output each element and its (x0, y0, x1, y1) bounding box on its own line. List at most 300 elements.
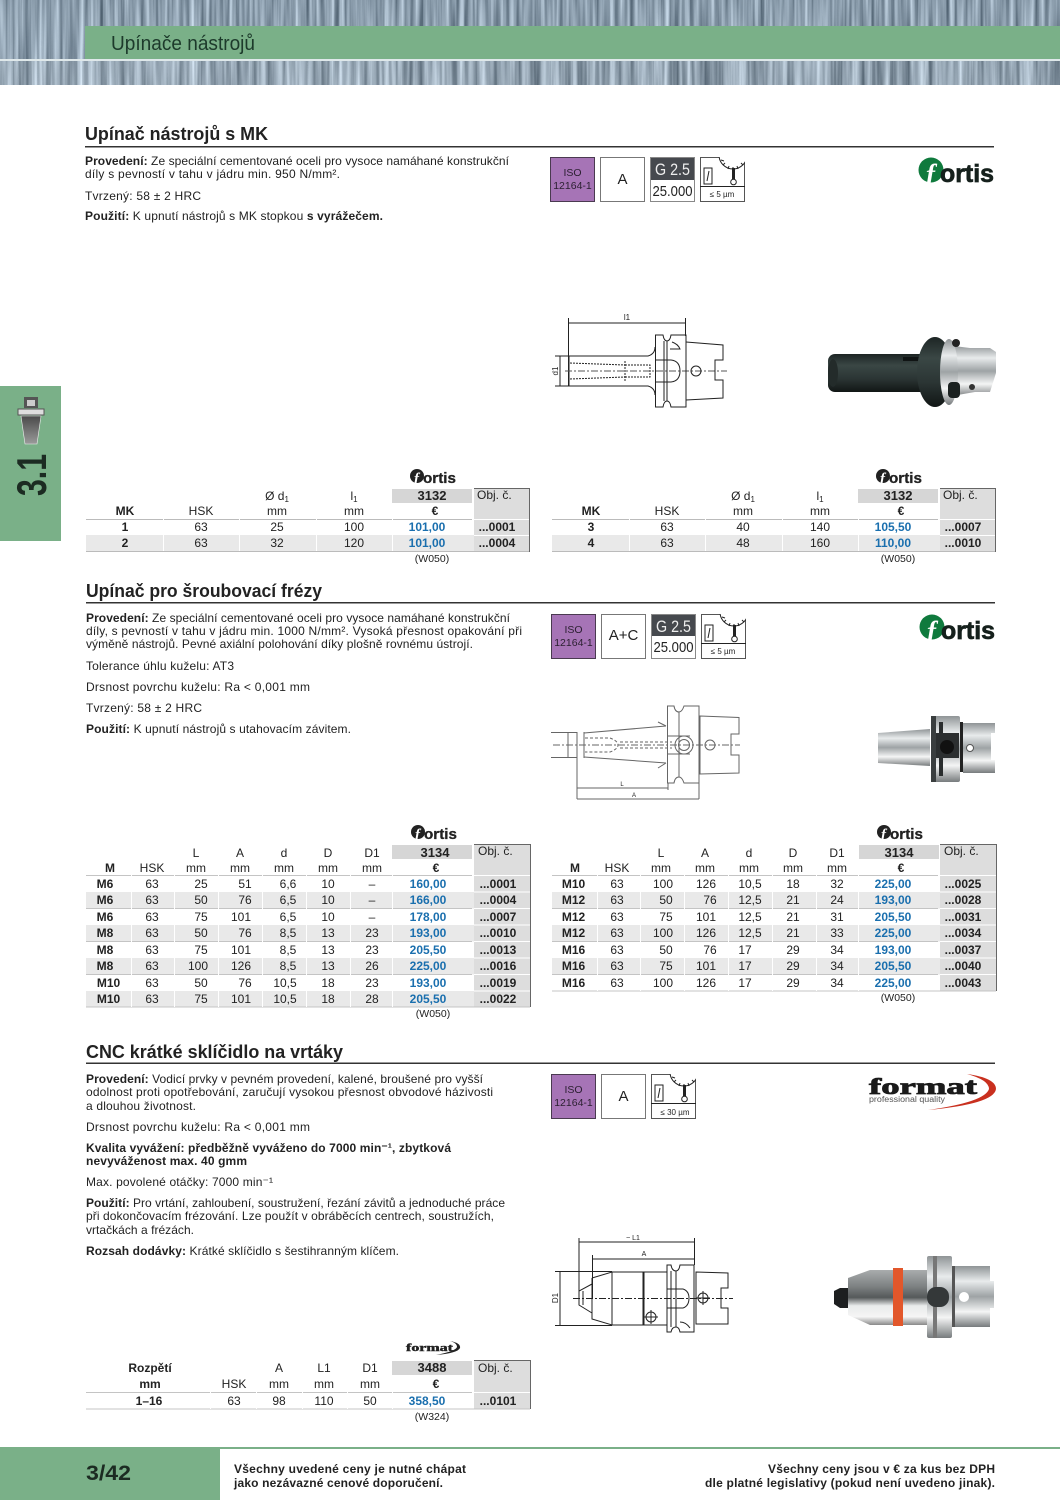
table: 3134 right: 12,5 (738, 926, 762, 940)
product photo 2 (878, 716, 995, 782)
table: 3488: ...0101 (480, 1394, 517, 1408)
table: 3134 left: 13 (321, 943, 335, 957)
table: 3134 left: 63 (145, 992, 159, 1006)
table: 3134 left: 50 (194, 926, 208, 940)
table: 3132 left: 101,00 (409, 536, 446, 550)
table: 3132 left: 32 (270, 536, 284, 550)
logo: fortis: ortis (941, 617, 995, 645)
table: 3488: A (275, 1361, 283, 1375)
small logo: fortis: f (415, 827, 422, 843)
logo: fortis (918, 158, 994, 189)
table: 3134 right: M12 (562, 893, 585, 907)
table: 3134 right: 205,50 (875, 959, 912, 973)
table: 3132 right: 3132 (884, 488, 912, 503)
table: 3132 left: 1 (122, 520, 129, 534)
table: 3134 right: 126 (696, 926, 716, 940)
badge: runout gauge (701, 598, 748, 658)
technical drawing 2: L (620, 782, 624, 788)
footer note right: Všechny ceny jsou v € za kus bez DPH (768, 1462, 995, 1476)
small logo: fortis (877, 825, 923, 843)
table: 3134 right: 32 (830, 877, 844, 891)
section 3 description: při dokončovacím frézování. Lze použít v obráběcích centrech, soustružích, (86, 1209, 494, 1223)
table: 3134 right: 193,00 (875, 893, 912, 907)
table: 3134 left: 50 (194, 976, 208, 990)
table: 3134 left: ...0016 (480, 959, 517, 973)
table: 3134 right: 100 (653, 926, 673, 940)
badge: A (600, 158, 644, 202)
table: 3134 left: 63 (145, 959, 159, 973)
table: 3134 right: (W050) (881, 992, 915, 1004)
table: 3134 right: ...0025 (945, 877, 982, 891)
logo: fortis: f (926, 159, 938, 189)
table: 3488: 110 (314, 1394, 334, 1408)
table: 3134 right: 12,5 (738, 893, 762, 907)
table: 3134 left: 101 (231, 992, 251, 1006)
section 2 description: Použití: K upnutí nástrojů s utahovacím závitem. (86, 722, 351, 736)
table: 3132 right: 110,00 (875, 536, 911, 550)
table: 3132 right (552, 469, 996, 565)
badge: G 2.5: G 2.5 (656, 617, 691, 636)
table: 3134 right: ...0043 (945, 976, 982, 990)
table: 3132 left: Ø d (265, 489, 284, 503)
small logo: fortis: ortis (890, 826, 923, 843)
table: 3134 right: 17 (738, 943, 752, 957)
section 3 description: Rozsah dodávky: Krátké sklíčidlo s šestihranným klíčem. (86, 1244, 399, 1258)
technical drawing 1 (551, 313, 727, 407)
logo: format (869, 1074, 996, 1110)
section 3 description: nevyváženost max. 40 gmm (86, 1154, 247, 1168)
table: 3134 left: 101 (231, 943, 251, 957)
badge: ISO: 12164-1 (554, 637, 593, 649)
table: 3134 right: 225,00 (875, 926, 912, 940)
table: 3132 left: 2 (122, 536, 129, 550)
badge: ISO: ISO (563, 167, 582, 179)
table: 3134 left: M10 (97, 976, 120, 990)
table: 3134 right: 10,5 (738, 877, 762, 891)
table: 3134 left: – (369, 877, 376, 891)
table: 3488: 98 (272, 1394, 286, 1408)
table: 3132 left: 120 (344, 536, 364, 550)
small logo: format (406, 1341, 460, 1355)
table: 3132 right: 1 (819, 495, 824, 504)
section 1 description: díly s pevností v tahu v jádru min. 950 N/mm². (85, 167, 340, 181)
table: 3134 right: mm (739, 861, 759, 875)
table: 3134 left: 160,00 (410, 877, 447, 891)
table: 3134 left: 25 (194, 877, 208, 891)
section 1 heading: Upínač nástrojů s MK (85, 124, 268, 144)
technical drawing 1: l1 (624, 313, 631, 322)
table: 3132 right: Ø d (731, 489, 750, 503)
table: 3132 right: Obj. č. (943, 488, 978, 502)
badge: runout gauge (700, 141, 747, 202)
table: 3134 left: – (369, 910, 376, 924)
small logo: fortis: f (881, 827, 888, 843)
table: 3488: 50 (363, 1394, 377, 1408)
table: 3134 right: A (701, 846, 709, 860)
page number block (0, 1447, 220, 1500)
table: 3488: 3488 (418, 1360, 446, 1375)
table: 3134 left: 18 (321, 976, 335, 990)
badge: G 2.5 (652, 614, 696, 658)
table: 3134 right: 193,00 (875, 943, 912, 957)
table: 3134 right: d (746, 846, 752, 860)
table: 3132 left: MK (116, 504, 135, 518)
table: 3134 right: 29 (786, 959, 800, 973)
table: 3132 left: Obj. č. (477, 488, 512, 502)
table: 3132 right: l (816, 489, 819, 503)
table: 3134 right: 225,00 (875, 877, 912, 891)
badge: runout gauge: ≤ 5 µm (711, 647, 736, 656)
section 3 description: Provedení: Vodicí prvky v pevném provedení, kalené, broušené pro vyšší (86, 1072, 484, 1086)
badge: G 2.5: G 2.5 (655, 160, 690, 179)
table: 3134 left: 10,5 (273, 992, 297, 1006)
logo: format: format (869, 1074, 978, 1099)
table: 3132 right: 105,50 (875, 520, 912, 534)
table: 3132 left: mm (344, 504, 364, 518)
table: 3134 right: 225,00 (875, 976, 912, 990)
table: 3134 right: D1 (829, 846, 845, 860)
table: 3132 left: 3132 (418, 488, 446, 503)
badge: G 2.5 (650, 158, 694, 202)
table: 3134 right: mm (827, 861, 847, 875)
table: 3132 left: 100 (344, 520, 364, 534)
table: 3132 right: mm (733, 504, 753, 518)
table: 3132 right: 3 (588, 520, 595, 534)
table: 3488: 63 (227, 1394, 241, 1408)
table: 3132 right: (W050) (881, 553, 915, 565)
table: 3134 right: 17 (738, 959, 752, 973)
table: 3134 right: 205,50 (875, 910, 912, 924)
table: 3134 right: 21 (786, 926, 800, 940)
logo: fortis (920, 614, 995, 646)
table: 3134 left: 63 (145, 926, 159, 940)
table: 3134 right: M (570, 861, 580, 875)
table: 3134 left: mm (186, 861, 206, 875)
footer note left: Všechny uvedené ceny je nutné chápat (234, 1462, 466, 1476)
table: 3134 right: Obj. č. (944, 844, 979, 858)
section 1 description (85, 154, 510, 223)
table: 3488: mm (314, 1377, 334, 1391)
technical drawing 3: D1 (551, 1292, 560, 1303)
table: 3134 left: mm (230, 861, 250, 875)
table: 3132 left (86, 469, 530, 565)
table: 3134 left: 51 (238, 877, 252, 891)
section 2 description: Tvrzený: 58 ± 2 HRC (86, 701, 202, 715)
table: 3134 right: ...0034 (945, 926, 982, 940)
table: 3134 left: (W050) (416, 1008, 450, 1020)
table: 3134 left: M (105, 861, 115, 875)
section 3 description: Drsnost povrchu kuželu: Ra < 0,001 mm (86, 1120, 310, 1134)
table: 3134 left: 205,50 (410, 943, 447, 957)
table: 3488: € (433, 1377, 440, 1391)
logo: format: professional quality (869, 1095, 945, 1104)
footer note left (233, 1462, 466, 1490)
table: 3132 right: 63 (660, 536, 674, 550)
table: 3134 right: 34 (830, 943, 844, 957)
table: 3134 left: M8 (97, 943, 114, 957)
technical drawing 3: ~ L1 (626, 1235, 640, 1242)
footer (0, 1447, 1060, 1500)
table: 3134 right: 21 (786, 910, 800, 924)
table: 3134 left: 10 (321, 893, 335, 907)
badge: A: A (617, 171, 628, 188)
section 2 heading: Upínač pro šroubovací frézy (86, 581, 322, 601)
section 1 description: Použití: K upnutí nástrojů s MK stopkou s vyrážečem. (85, 209, 383, 223)
section 2 description: Tolerance úhlu kuželu: AT3 (86, 659, 234, 673)
table: 3132 right: mm (810, 504, 830, 518)
technical drawing 3: A (642, 1251, 647, 1258)
table: 3134 right: 100 (653, 976, 673, 990)
badge: ISO: ISO (564, 624, 583, 636)
table: 3134 left: 50 (194, 893, 208, 907)
technical drawing 1: d1 (551, 366, 560, 375)
table: 3134 left: 75 (194, 992, 208, 1006)
table: 3134 left: A (236, 846, 244, 860)
table: 3134 right: M12 (562, 910, 585, 924)
table: 3134 right: M16 (562, 959, 585, 973)
table: 3488: Rozpětí (128, 1361, 172, 1375)
small logo: fortis: ortis (423, 470, 456, 487)
header title bar: Upínače nástrojů (111, 33, 255, 55)
section 2 description: díly, s pevností v tahu v jádru min. 1000 N/mm². Vysoká přesnost opakování při (86, 624, 522, 638)
table: 3134 left: 23 (365, 926, 379, 940)
table: 3134 right: D (789, 846, 798, 860)
table: 3134 right: 76 (703, 893, 717, 907)
table: 3134 left: 166,00 (410, 893, 447, 907)
table: 3134 right: 17 (738, 976, 752, 990)
table: 3134 right: 34 (830, 959, 844, 973)
table: 3134 right: € (898, 861, 905, 875)
table: 3134 left: 23 (365, 943, 379, 957)
badge: G 2.5: 25.000 (654, 639, 694, 656)
table: 3134 right: 50 (659, 943, 673, 957)
table: 3134 left: M6 (97, 877, 114, 891)
small logo: fortis (411, 825, 457, 843)
table: 3488: D1 (362, 1361, 378, 1375)
section 1 description: Tvrzený: 58 ± 2 HRC (85, 189, 201, 203)
small logo: fortis (410, 469, 456, 487)
table: 3134 left: 63 (145, 910, 159, 924)
badge: ISO (550, 158, 594, 202)
table: 3134 right: 63 (610, 943, 624, 957)
table: 3134 left: mm (274, 861, 294, 875)
section 3 description: a dlouhou životnost. (86, 1099, 196, 1113)
table: 3134 right: 34 (830, 976, 844, 990)
table: 3132 left: mm (267, 504, 287, 518)
footer note right (705, 1462, 995, 1490)
small logo: format: format (406, 1343, 454, 1354)
table: 3134 left: 23 (365, 976, 379, 990)
table: 3134 right: ...0040 (945, 959, 982, 973)
table: 3134 left: 75 (194, 910, 208, 924)
table: 3132 right: ...0007 (945, 520, 982, 534)
table: 3132 right: 63 (660, 520, 674, 534)
table: 3134 right: 21 (786, 893, 800, 907)
table: 3134 right: L (658, 846, 665, 860)
badge: ISO: ISO (564, 1084, 583, 1096)
table: 3134 left: 18 (321, 992, 335, 1006)
section 2 description: Provedení: Ze speciální cementované oceli pro vysoce namáhané konstrukční (86, 611, 511, 625)
section 3 description: Max. povolené otáčky: 7000 min⁻¹ (86, 1175, 273, 1189)
table: 3132 right: MK (582, 504, 601, 518)
badge: A: A (618, 1088, 629, 1105)
section 3 description: vrtačkách a frézách. (86, 1223, 194, 1237)
page number block: 3/42 (86, 1462, 131, 1485)
table: 3132 left: 1 (353, 495, 358, 504)
table: 3134 left: 76 (238, 926, 252, 940)
small logo: fortis: ortis (889, 470, 922, 487)
table: 3134 left: 225,00 (410, 959, 447, 973)
table: 3134 left: M6 (97, 910, 114, 924)
table: 3134 right: HSK (605, 861, 629, 875)
table: 3134 right: 63 (610, 893, 624, 907)
badge: G 2.5: 25.000 (652, 183, 692, 200)
table: 3134 left: 13 (321, 959, 335, 973)
table: 3132 left: ...0004 (479, 536, 516, 550)
table: 3132 right: 48 (736, 536, 750, 550)
section 3 description: Kvalita vyvážení: předběžně vyváženo do 7000 min⁻¹, zbytková (86, 1141, 451, 1155)
section 3 badges (552, 1058, 698, 1118)
technical drawing 2: A (632, 793, 636, 799)
section 3 heading: CNC krátké sklíčidlo na vrtáky (86, 1042, 343, 1062)
table: 3488: L1 (317, 1361, 331, 1375)
chapter number: 3.1 (8, 454, 55, 496)
table: 3134 right: 12,5 (738, 910, 762, 924)
table: 3134 right: 126 (696, 877, 716, 891)
table: 3488: 358,50 (409, 1394, 446, 1408)
table: 3134 left: 10,5 (273, 976, 297, 990)
table: 3134 right: 18 (786, 877, 800, 891)
table: 3132 left: 1 (284, 495, 289, 504)
table: 3134 left: 6,6 (280, 877, 297, 891)
small logo: fortis: f (880, 471, 887, 487)
table: 3132 right: HSK (655, 504, 679, 518)
table: 3134 right: 75 (659, 959, 673, 973)
table: 3132 right: € (898, 504, 905, 518)
table: 3134 left: ...0022 (480, 992, 517, 1006)
table: 3134 left: 178,00 (410, 910, 447, 924)
logo: fortis: ortis (940, 160, 994, 188)
table: 3132 right: 1 (750, 495, 755, 504)
table: 3134 right: M12 (562, 926, 585, 940)
table: 3134 left (86, 825, 530, 1020)
table: 3134 left: L (193, 846, 200, 860)
table: 3488: HSK (222, 1377, 246, 1391)
footer note left: jako nezávazné cenové doporučení. (233, 1476, 443, 1490)
table: 3134 left: mm (362, 861, 382, 875)
table: 3134 right: 100 (653, 877, 673, 891)
section 1 badges (550, 141, 747, 202)
table: 3134 left: 205,50 (410, 992, 447, 1006)
table: 3134 left: D (324, 846, 333, 860)
table: 3134 left: 13 (321, 926, 335, 940)
table: 3134 left: HSK (140, 861, 164, 875)
section 3 description: odolnost proti opotřebování, zaručují vysokou přesnost obvodové házivosti (86, 1085, 493, 1099)
table: 3134 right: M10 (562, 877, 585, 891)
table: 3134 left: 193,00 (410, 976, 447, 990)
small logo: fortis: f (414, 471, 421, 487)
table: 3132 left: 63 (194, 536, 208, 550)
table: 3132 left: 25 (270, 520, 284, 534)
table: 3134 right: 29 (786, 943, 800, 957)
footer note right: dle platné legislativy (pokud není uvedeno jinak). (705, 1476, 995, 1490)
table: 3134 left: 76 (238, 976, 252, 990)
table: 3134 left: 126 (231, 959, 251, 973)
table: 3132 right: 160 (810, 536, 830, 550)
table: 3134 left: 3134 (421, 845, 450, 860)
badge: A (602, 1074, 646, 1118)
table: 3134 right: 3134 (885, 845, 914, 860)
small logo: fortis (876, 469, 922, 487)
badge: ISO (552, 1074, 596, 1118)
table: 3134 right: 29 (786, 976, 800, 990)
section 3 description (86, 1072, 505, 1258)
table: 3134 right: 50 (659, 893, 673, 907)
badge: ISO: 12164-1 (553, 180, 592, 192)
table: 3134 left: ...0019 (480, 976, 517, 990)
table: 3134 right: 75 (659, 910, 673, 924)
table: 3134 left: Obj. č. (478, 844, 513, 858)
table: 3134 right: mm (783, 861, 803, 875)
badge: A+C (602, 614, 646, 658)
table: 3134 left: M8 (97, 959, 114, 973)
table: 3132 right: 4 (588, 536, 595, 550)
table: 3134 left: M8 (97, 926, 114, 940)
table: 3488: mm (269, 1377, 289, 1391)
table: 3134 right: ...0031 (945, 910, 982, 924)
table: 3134 left: 28 (365, 992, 379, 1006)
table: 3134 right: M16 (562, 943, 585, 957)
table: 3134 left: 100 (188, 959, 208, 973)
table: 3134 left: ...0013 (480, 943, 517, 957)
table: 3134 left: 75 (194, 943, 208, 957)
table: 3134 left: 193,00 (410, 926, 447, 940)
table: 3134 right: mm (695, 861, 715, 875)
product photo 3 (834, 1256, 994, 1338)
table: 3134 left: M6 (97, 893, 114, 907)
badge: ISO: 12164-1 (554, 1097, 593, 1109)
badge: runout gauge: ≤ 30 µm (660, 1108, 690, 1117)
header title bar (85, 26, 1060, 59)
table: 3134 right: 33 (830, 926, 844, 940)
table: 3134 left: – (369, 893, 376, 907)
badge: runout gauge (651, 1058, 698, 1118)
table: 3134 right: mm (651, 861, 671, 875)
table: 3134 right: 63 (610, 926, 624, 940)
table: 3488: Obj. č. (478, 1361, 513, 1375)
table: 3134 right: 76 (703, 943, 717, 957)
table: 3134 right: 126 (696, 976, 716, 990)
table: 3134 right: 24 (830, 893, 844, 907)
product photo 1 (828, 337, 996, 407)
icon: HSK holder (18, 397, 44, 444)
table: 3134 right: 63 (610, 877, 624, 891)
table: 3134 left: D1 (364, 846, 380, 860)
table: 3134 right: 63 (610, 959, 624, 973)
table: 3134 left: 76 (238, 893, 252, 907)
table: 3488: mm (139, 1377, 161, 1391)
table: 3134 left: 26 (365, 959, 379, 973)
table: 3134 left: 63 (145, 943, 159, 957)
table: 3134 right: 63 (610, 910, 624, 924)
table: 3134 left: 10 (321, 910, 335, 924)
table: 3134 left: 8,5 (280, 926, 297, 940)
section 2 badges (552, 598, 748, 658)
table: 3134 left: d (281, 846, 287, 860)
table: 3134 left: 8,5 (280, 943, 297, 957)
section 2 description (86, 611, 522, 736)
table: 3134 left: 10 (321, 877, 335, 891)
